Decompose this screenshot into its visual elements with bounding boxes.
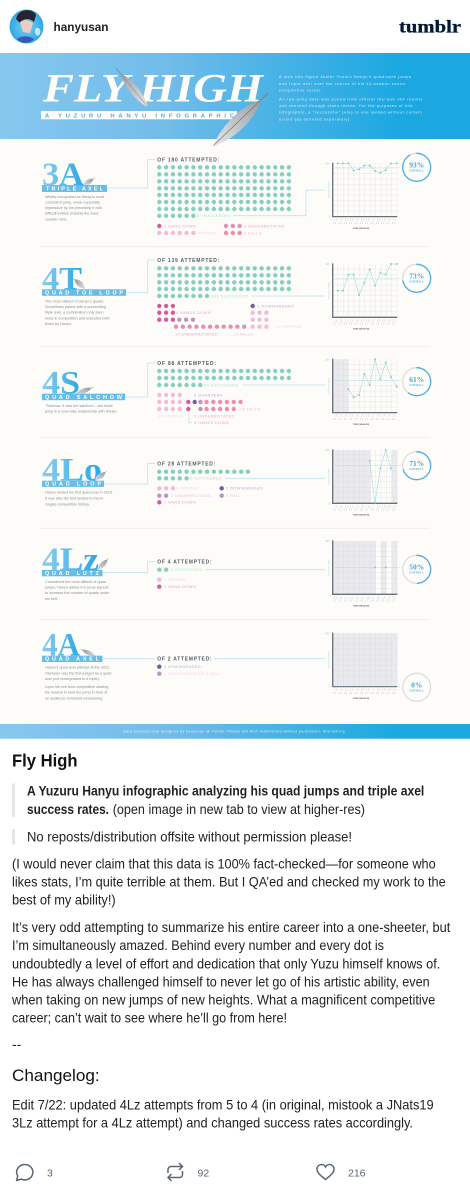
- legend: errors: 12 POPPED: [276, 324, 301, 329]
- donut: 71%: OVERALL: [409, 467, 424, 471]
- heading: attempts: OF 180 ATTEMPTED:: [157, 158, 220, 164]
- changelog text: Edit 7/22: updated 4Lz attempts from 5 to 4 (in original, mistook a JNats19: [12, 1096, 434, 1112]
- paragraph: disclaimer: (I would never claim that this data is 100% fact-checked—for someone who: [12, 855, 436, 871]
- description: Hanyu landed his first quad loop in 2016.: [45, 490, 113, 494]
- line chart: 100: [325, 450, 330, 452]
- donut: 71%: [403, 452, 431, 480]
- reblog count: 92: [198, 1168, 209, 1180]
- paragraph: reflection: undoubtedly a level of effort and dedication that only Yuzu himself knows of.: [12, 955, 440, 971]
- line chart: [325, 633, 402, 700]
- legend: errors: 13 FALLS: [240, 406, 260, 411]
- heading: 4T: [42, 261, 126, 297]
- heading: 4Lz: 4Lz: [42, 542, 99, 578]
- heading: 4A: QUAD AXEL: [45, 657, 100, 663]
- donut: 93%: OVERALL: [409, 169, 424, 173]
- description: triple axel, a combination only seen: [45, 311, 104, 315]
- blockquote: summary: [12, 783, 424, 817]
- icon: comment: [17, 1164, 33, 1180]
- dot grid: succeeded: 2 SUCCEEDED: [171, 567, 203, 572]
- donut: 61%: 61%: [409, 375, 424, 384]
- footer band: Data analyzed and designed by hanyusan @ Tumblr. Please DO NOT redistribute without permission. She will cry.: [123, 730, 346, 734]
- title: FLY HIGH: [42, 66, 265, 111]
- blockquote: summary: success rates.: [27, 801, 109, 817]
- panel: 4A quad axel: [42, 628, 431, 701]
- panel: 3A triple axel: [42, 153, 431, 235]
- description: [44, 580, 110, 601]
- description: [44, 404, 118, 414]
- donut: 0%: OVERALL: [409, 689, 424, 693]
- description: "Salchow. It was the salchow"—the fickle: [45, 404, 113, 408]
- description: Olympics was the first judged as a quad: [45, 671, 111, 675]
- subtitle: [41, 111, 237, 119]
- line chart: 10 11 12 13 14 15 16 17 18 19 20 21: [334, 690, 397, 692]
- heading: attempts: OF 4 ATTEMPTED:: [157, 560, 212, 566]
- intro text: infographic, a "successful" jump is one landed without certain: [279, 110, 421, 115]
- line chart: 11 12 13 14 15 16 17 18 19 20 21 22: [333, 223, 396, 225]
- line chart: 100: [325, 541, 330, 543]
- description: impressive by his preceding it with: [45, 206, 102, 210]
- heading: 4Lo: 4Lo: [42, 453, 102, 489]
- description: Considered the most difficult of quad: [45, 580, 106, 584]
- dot grid: succeeded: 167 SUCCEEDED: [194, 213, 231, 218]
- line chart: [325, 263, 402, 331]
- donut: 73%: OVERALL: [409, 280, 424, 284]
- line chart: 10 11 12 13 14 15 16 17 18 19 20 21: [334, 416, 397, 418]
- intro text: All raw jump data was pulled from official ISU and JSF results: [279, 96, 423, 101]
- heading: 4T: QUAD TOE LOOP: [45, 290, 123, 296]
- description: times by Hanyu.: [45, 322, 72, 326]
- description: to increase the number of quads under: [45, 591, 110, 595]
- line chart: 0: [329, 594, 331, 596]
- line chart: [325, 163, 402, 230]
- legend: errors: 9 HANDS DOWN: [176, 310, 211, 315]
- dot grid: succeeded: [159, 167, 325, 218]
- heading: 3A: [42, 157, 107, 193]
- changelog text: [12, 1096, 434, 1131]
- legend: errors: 2 DOWNGRADED: [226, 486, 263, 491]
- paragraph: reflection: career; can’t wait to see where he’ll go from here!: [12, 1009, 287, 1025]
- legend: errors: [159, 486, 263, 505]
- legend: errors: 3 POPPED: [176, 486, 199, 491]
- intro text: [279, 74, 423, 121]
- description: consistent jump, made especially: [45, 200, 100, 204]
- logo: tumblr: tumblr: [399, 16, 461, 36]
- description: Widely recognized as Hanyu's most: [45, 195, 105, 199]
- legend: errors: 14 FALLS: [233, 331, 253, 336]
- heading: attempts: OF 2 ATTEMPTED:: [157, 657, 212, 663]
- line chart: SUCCESS RATE: [327, 377, 330, 394]
- description: axel (not downgraded to a triple).: [45, 677, 100, 681]
- line chart: [325, 540, 402, 608]
- line chart: TIME (SEASON): [353, 514, 369, 517]
- line chart: SUCCESS RATE: [327, 651, 330, 668]
- connector: [104, 463, 155, 484]
- description: [45, 300, 110, 326]
- heading: attempts: OF 28 ATTEMPTED:: [157, 461, 216, 467]
- paragraph: disclaimer: [12, 855, 446, 908]
- donut: 73%: 73%: [409, 272, 424, 281]
- panel: 4Lz quad lutz: [42, 540, 431, 608]
- donut: 0%: 0%: [411, 681, 422, 690]
- description: It was also the first landed in men's: [45, 496, 103, 500]
- connector: [125, 363, 155, 397]
- changelog text: 3Lz attempt for a 4Lz attempt) and changed success rates accordingly.: [12, 1115, 413, 1131]
- heading: 4S: QUAD SALCHOW: [45, 395, 123, 401]
- line chart: 10 11 12 13 14 15 16 17 18 19 20 21: [334, 597, 397, 599]
- line chart: SUCCESS RATE: [327, 282, 330, 299]
- legend: errors: [159, 223, 285, 235]
- dot grid: succeeded: 54 SUCCEEDED: [204, 382, 239, 387]
- donut: 93%: 93%: [409, 161, 424, 170]
- like count: 216: [348, 1168, 366, 1180]
- panel: 4Lo quad loop: [42, 449, 431, 517]
- username: hanyusan: [54, 22, 108, 34]
- dot grid: succeeded: 101 SUCCEEDED: [212, 293, 249, 298]
- legend: errors: 26 POPPED: [158, 413, 183, 418]
- line chart: TIME (SEASON): [353, 423, 369, 426]
- heading: 4T: 4T: [42, 261, 82, 297]
- line chart: 11 12 13 14 15 16 17 18 19 20 21 22: [333, 601, 396, 603]
- line chart: SUCCESS RATE: [327, 181, 330, 198]
- icon: feather top: [113, 65, 152, 110]
- heading: 4Lz: QUAD LUTZ: [45, 571, 100, 577]
- description: Upon his exit from competitive skating,: [45, 685, 109, 689]
- legend: errors: 1 DOWNGRADED: [257, 303, 294, 308]
- description: difficult entries (notably the back: [45, 212, 99, 216]
- line chart: 100: [325, 163, 330, 165]
- heading: 4A: [42, 628, 102, 664]
- legend: errors: 1 HAND DOWN: [164, 223, 196, 228]
- legend: errors: [158, 392, 260, 425]
- description: singles competition history.: [45, 502, 90, 506]
- donut: 61%: [403, 368, 431, 396]
- icon: avatar: [10, 10, 44, 44]
- line chart: SUCCESS RATE: [327, 468, 330, 485]
- post title: Fly High: [12, 751, 78, 771]
- description: jump in a love-hate relationship with Hanyu.: [44, 410, 118, 414]
- blockquote: summary: (open image in new tab to view at higher-res): [113, 801, 365, 817]
- donut: 50%: 50%: [409, 563, 424, 572]
- description: his belt.: [45, 597, 58, 601]
- description: an audience remained unwavering.: [45, 696, 103, 700]
- icon: heart: [317, 1165, 334, 1180]
- line chart: 0: [329, 413, 331, 415]
- infographic background: [0, 139, 470, 724]
- line chart: 11 12 13 14 15 16 17 18 19 20 21 22: [333, 419, 396, 421]
- line chart: 11 12 13 14 15 16 17 18 19 20 21 22: [333, 510, 396, 512]
- line chart: [325, 359, 402, 426]
- legend: errors: 2 QUARTERS: [194, 392, 223, 397]
- heading: attempts: OF 139 ATTEMPTED:: [157, 258, 220, 264]
- heading: 4S: 4S: [42, 366, 80, 402]
- line chart: 100: [325, 359, 330, 361]
- line chart: 100: [325, 633, 330, 635]
- intro text: errors (as denoted separately).: [279, 116, 351, 121]
- donut: 71%: 71%: [409, 459, 424, 468]
- legend: errors: 1 POPPED: [164, 577, 187, 582]
- paragraph: reflection: He has always challenged himself to never let go of his artistic ability, even: [12, 973, 430, 989]
- subtitle: A YUZURU HANYU INFOGRAPHIC: [45, 113, 235, 119]
- heading: 4Lo: QUAD LOOP: [45, 482, 101, 488]
- line chart: TIME (SEASON): [353, 328, 369, 331]
- legend: errors: 1 FALL: [226, 493, 241, 498]
- paragraph: reflection: I’m simultaneously amazed. Behind every number and every dot is: [12, 937, 384, 953]
- intro text: and checked through video review. For the purposes of this: [279, 103, 413, 108]
- heading: 4S: [42, 366, 125, 402]
- legend: errors: 6 POPPED: [194, 230, 217, 235]
- legend: errors: 1 DOWNGRADED: [164, 664, 201, 669]
- connector: [107, 160, 155, 188]
- legend: errors: 1 HAND DOWN: [164, 500, 196, 505]
- description: [45, 490, 113, 506]
- blockquote: notice: No reposts/distribution offsite without permission please!: [27, 828, 352, 844]
- line chart: TIME (SEASON): [353, 227, 369, 230]
- footer band: [0, 724, 470, 739]
- legend: errors: 3 UNDERROTATED: [244, 223, 285, 228]
- paragraph: reflection: [11, 919, 450, 1025]
- paragraph: disclaimer: best of my ability!): [12, 892, 116, 908]
- legend: errors: 17 UNDERROTATED: [175, 331, 218, 336]
- donut: 61%: OVERALL: [409, 383, 424, 387]
- heading: attempts: OF 88 ATTEMPTED:: [157, 361, 216, 367]
- heading: 3A: TRIPLE AXEL: [46, 186, 104, 192]
- line chart: 0: [329, 217, 331, 219]
- line chart: 100: [325, 264, 330, 266]
- dot grid: succeeded: 20 SUCCEEDED: [188, 476, 222, 481]
- line chart: 0: [329, 687, 331, 689]
- description: Sometimes paired with a succeeding: [45, 305, 106, 309]
- description: Hanyu's quad axel attempt at the 2022: [45, 666, 109, 670]
- line chart: 10 11 12 13 14 15 16 17 18 19 20 21: [334, 220, 397, 222]
- icon: feather bottom: [209, 88, 273, 151]
- legend: errors: 5 HANDS DOWN: [194, 420, 229, 425]
- line chart: TIME (SEASON): [353, 605, 369, 608]
- donut: 73%: [403, 264, 431, 292]
- heading: 3A: 3A: [42, 157, 84, 193]
- connector: [126, 260, 155, 292]
- line chart: [325, 449, 402, 517]
- connector: [102, 562, 155, 573]
- line chart: 11 12 13 14 15 16 17 18 19 20 21 22: [333, 693, 396, 695]
- donut: 50%: OVERALL: [409, 571, 424, 575]
- legend: errors: [159, 577, 196, 589]
- line chart: 10 11 12 13 14 15 16 17 18 19 20 21: [334, 320, 397, 322]
- line chart: 0: [329, 503, 331, 505]
- changelog heading: Changelog:: [12, 1066, 100, 1085]
- description: The most utilized of Hanyu's quads.: [45, 300, 104, 304]
- donut: 50%: [403, 555, 431, 583]
- intro text: and triple axel over the course of his 12-season senior: [279, 81, 406, 86]
- donut: 0%: [403, 673, 431, 701]
- line chart: 11 12 13 14 15 16 17 18 19 20 21 22: [333, 324, 396, 326]
- description: counter turn).: [45, 217, 67, 221]
- description: [45, 666, 111, 700]
- legend: errors: 1 HAND DOWN: [164, 584, 196, 589]
- line chart: 0: [329, 317, 331, 319]
- line chart: TIME (SEASON): [353, 697, 369, 700]
- legend: errors: [159, 664, 221, 676]
- description: twice in competition and executed both: [45, 316, 110, 320]
- panel: 4T quad toe loop: [42, 258, 431, 336]
- comment count: 3: [47, 1168, 53, 1180]
- heading: 4A: 4A: [42, 628, 80, 664]
- description: jumps, Hanyu added it to jump layouts: [44, 586, 109, 590]
- legend: errors: 2 UNDERROTATED: [171, 493, 211, 498]
- icon: reblog: [168, 1163, 182, 1181]
- line chart: SUCCESS RATE: [327, 559, 330, 576]
- paragraph: reflection: when taking on new jumps of new heights. What a magnificent competitive: [11, 991, 435, 1007]
- separator text: --: [12, 1036, 22, 1052]
- legend: errors: 3 FALLS: [244, 230, 262, 235]
- panel: banner: [0, 53, 470, 151]
- intro text: A look into figure skater Yuzuru Hanyu's quadruple jumps: [279, 74, 411, 79]
- panel: 4S quad salchow: [42, 359, 431, 426]
- legend: errors: 1 UNDERROTATED 1 FALL: [164, 671, 221, 676]
- intro text: competitive career.: [279, 88, 322, 92]
- legend: errors: [159, 303, 301, 336]
- legend: errors: 5 UNDERROTATED: [194, 413, 235, 418]
- line chart: 10 11 12 13 14 15 16 17 18 19 20 21: [334, 506, 397, 508]
- infographic: [0, 53, 470, 739]
- description: his resolve to land the jump in front of: [45, 691, 108, 695]
- donut: 93%: [403, 153, 431, 181]
- description: [45, 195, 105, 221]
- connector: [102, 658, 325, 660]
